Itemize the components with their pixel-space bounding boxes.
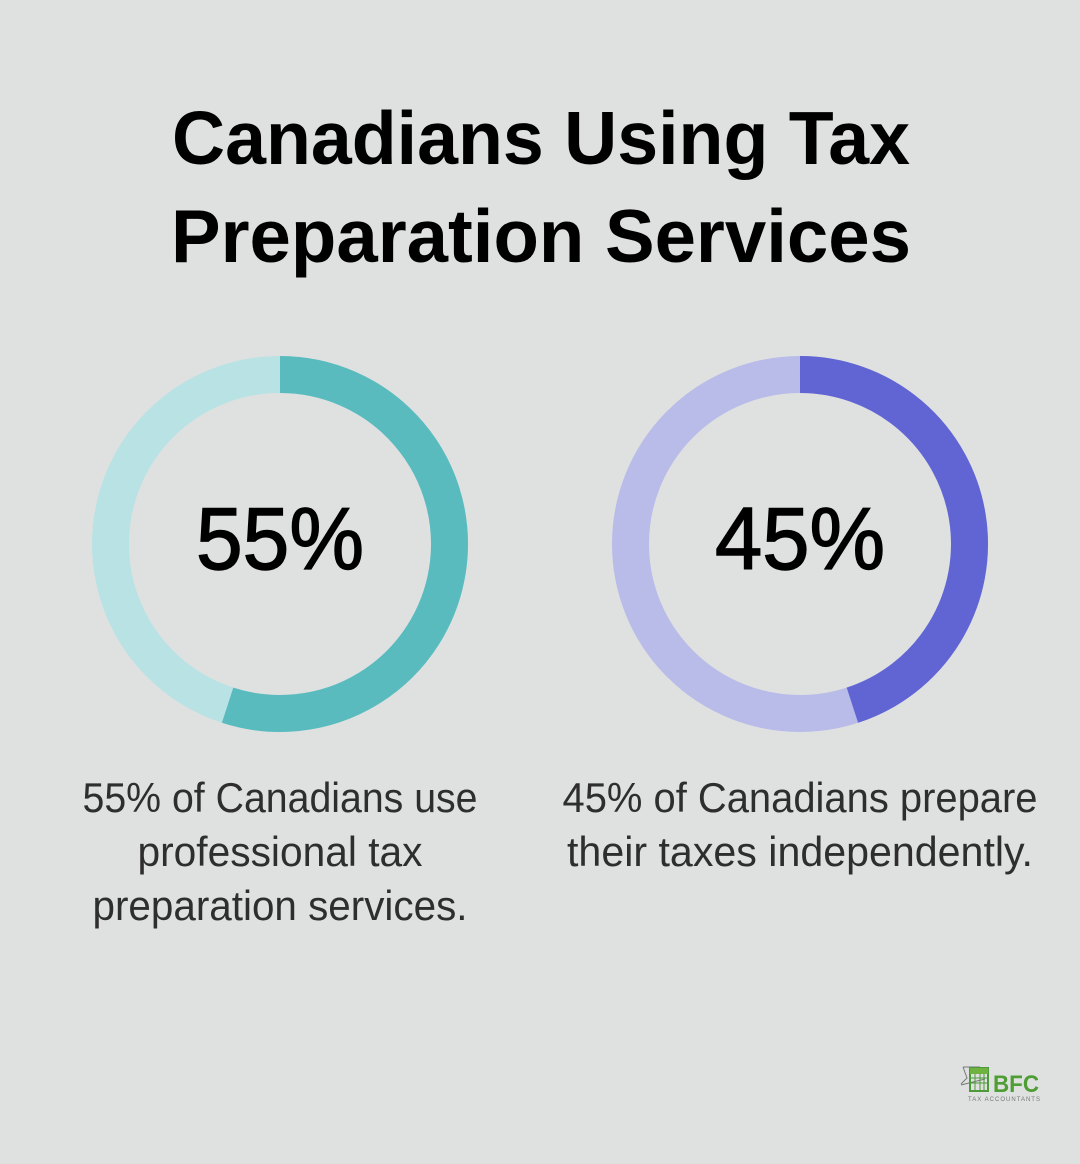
- panel: 45 percent stat: [562, 374, 1038, 875]
- description: 45%: their taxes independently.: [567, 828, 1033, 875]
- description: 55%: professional tax: [138, 828, 422, 875]
- panel: 55 percent stat: [82, 374, 478, 929]
- description: 45%: 45% of Canadians prepare: [562, 774, 1038, 821]
- value: 45%: 45%: [715, 489, 885, 588]
- logo wordmark: BFC: [993, 1071, 1039, 1098]
- icon: calculator: [961, 1067, 988, 1091]
- donut chart: 45%: [630, 374, 970, 714]
- title: Preparation Services: [171, 194, 911, 278]
- donut chart: 55%: [110, 374, 450, 714]
- title: [171, 96, 911, 278]
- value: 55%: 55%: [196, 489, 364, 588]
- description: 55%: [82, 774, 478, 929]
- logo tagline: TAX ACCOUNTANTS: [968, 1097, 1040, 1103]
- description: 55%: preparation services.: [92, 882, 468, 929]
- description: 55%: 55% of Canadians use: [82, 774, 478, 821]
- logo: BFC Tax Accountants: [961, 1067, 1040, 1103]
- description: 45%: [562, 774, 1038, 875]
- title: Canadians Using Tax: [172, 96, 910, 180]
